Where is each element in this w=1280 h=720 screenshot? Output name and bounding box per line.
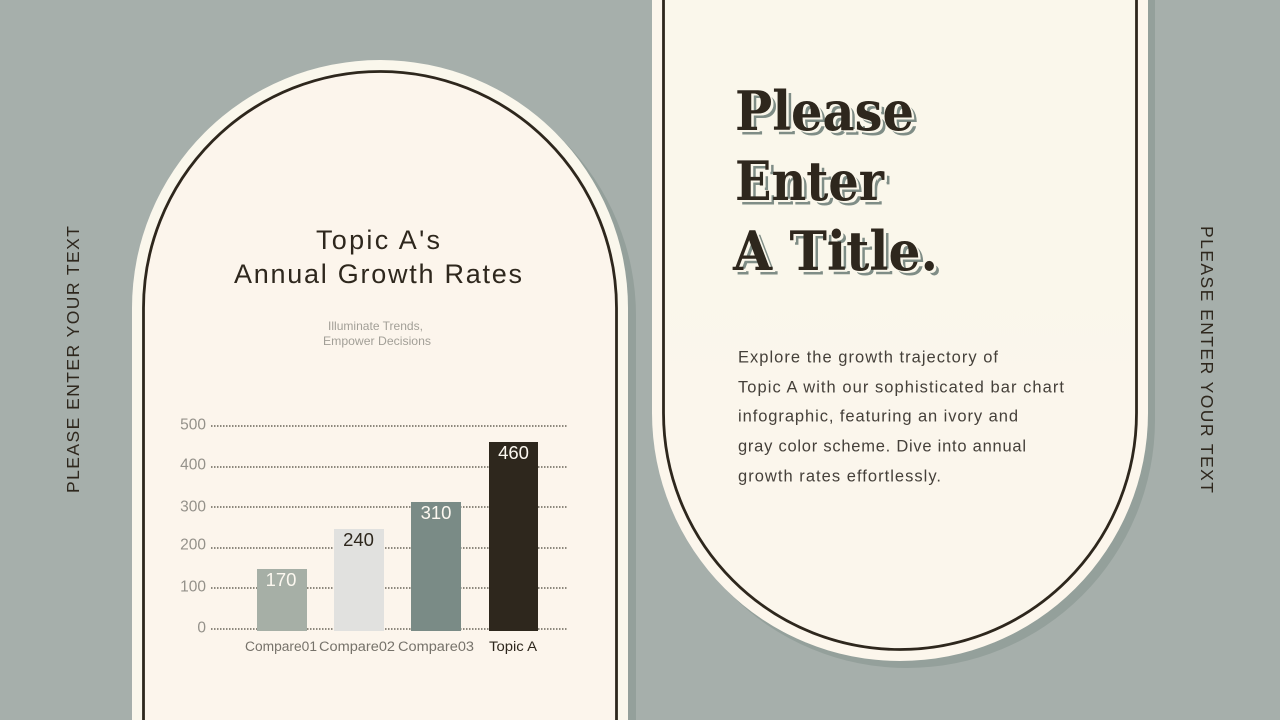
left vertical caption: PLEASE ENTER YOUR TEXT — [63, 226, 83, 493]
bar values — [266, 442, 529, 590]
right vertical caption: PLEASE ENTER YOUR TEXT — [1197, 226, 1217, 493]
main title: A Title. — [737, 224, 943, 288]
main title: Enter — [738, 151, 887, 215]
bar values: 460 — [498, 442, 529, 463]
bar values: 170 — [266, 569, 296, 590]
bar: Compare02 — [334, 529, 384, 631]
x axis labels — [245, 639, 537, 654]
chart heading — [234, 225, 522, 289]
bar: Compare01 — [257, 569, 307, 631]
chart subtitle — [323, 319, 431, 348]
x axis labels: Compare03 — [398, 639, 474, 654]
x axis labels: Compare02 — [319, 639, 395, 654]
bar chart — [180, 416, 567, 654]
main title: A Title. — [732, 219, 938, 283]
bar: Topic A — [489, 442, 538, 631]
body text: gray color scheme. Dive into annual — [738, 438, 1026, 456]
x axis labels: Compare01 — [245, 639, 317, 654]
body text: infographic, featuring an ivory and — [738, 408, 1018, 426]
chart subtitle: Illuminate Trends, — [328, 319, 423, 333]
y axis labels: 400 — [180, 456, 206, 474]
y axis labels — [180, 416, 206, 636]
chart heading: Topic A's — [316, 225, 440, 255]
bar values: 240 — [343, 529, 374, 550]
main title: Please — [740, 84, 919, 148]
bar: Compare03 — [411, 502, 461, 631]
x axis labels: Topic A — [489, 639, 537, 654]
main title: Please — [735, 79, 914, 143]
body text — [738, 348, 1064, 486]
y axis labels: 300 — [180, 498, 206, 516]
body text: Topic A with our sophisticated bar chart — [738, 378, 1064, 396]
main title: Please — [738, 81, 916, 145]
main title: Enter — [740, 154, 889, 218]
chart heading: Annual Growth Rates — [234, 259, 522, 289]
main title — [732, 79, 943, 288]
body text: Explore the growth trajectory of — [738, 348, 998, 366]
bar values: 310 — [421, 502, 451, 523]
main title: A Title. — [735, 221, 940, 285]
main title: Enter — [735, 149, 884, 213]
y axis labels: 500 — [180, 416, 206, 434]
y axis labels: 200 — [180, 536, 206, 554]
chart subtitle: Empower Decisions — [323, 334, 431, 348]
body text: growth rates effortlessly. — [738, 468, 941, 486]
panel: title arch — [652, 0, 1155, 668]
y axis labels: 100 — [180, 578, 206, 596]
panel: chart arch — [132, 60, 636, 720]
y axis labels: 0 — [197, 620, 206, 636]
